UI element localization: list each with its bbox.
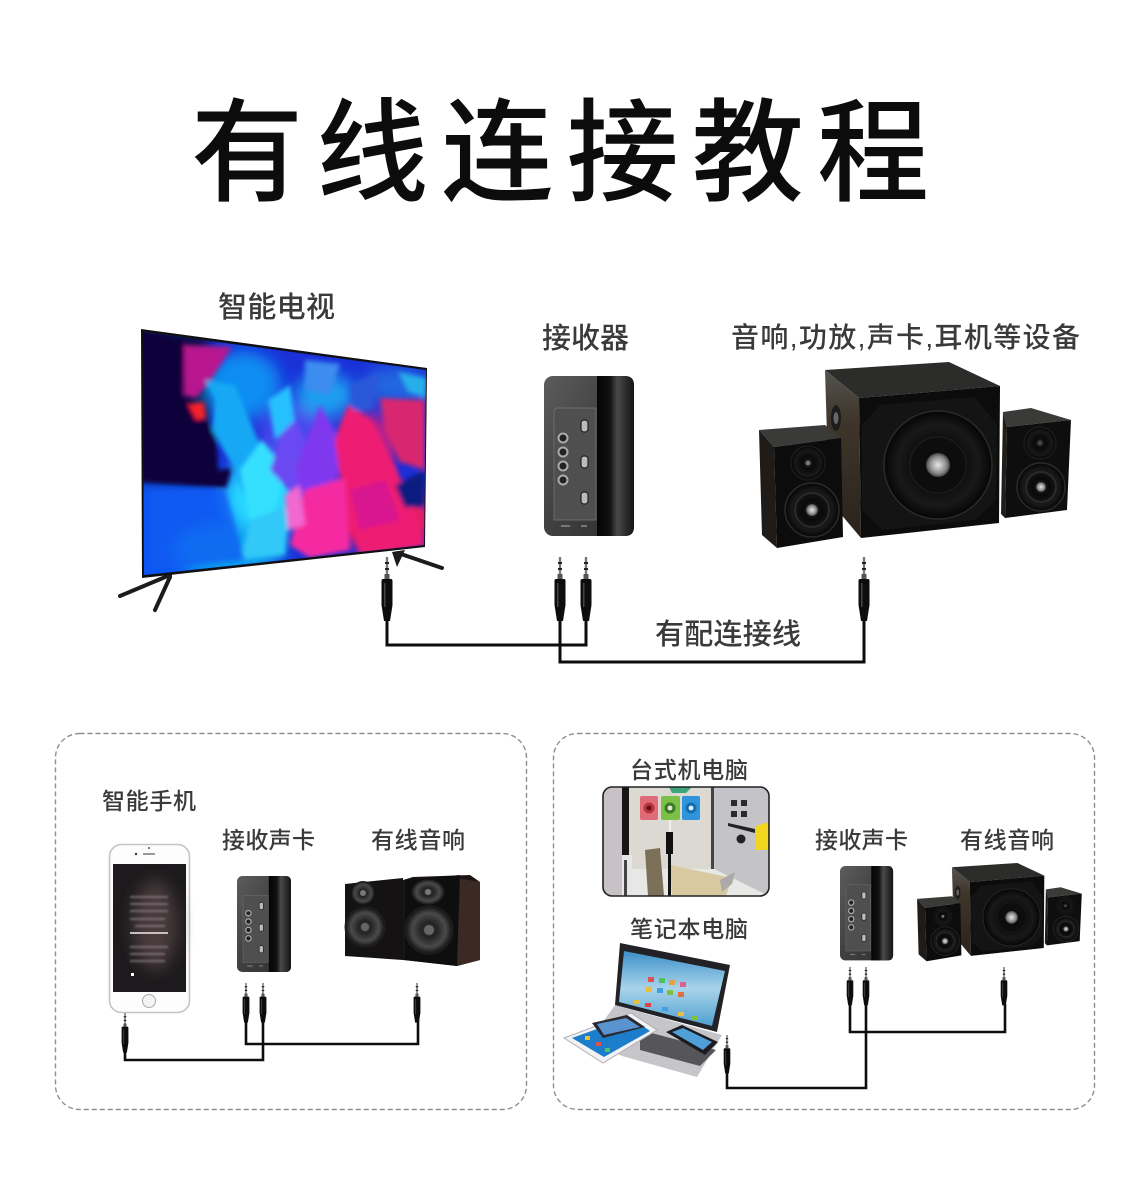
label: receiving sound card: 接收声卡 <box>222 827 315 853</box>
label: matching cable: 有配连接线 <box>655 618 801 651</box>
icon: receiver <box>544 376 634 536</box>
icon: sound card receiver <box>840 866 893 960</box>
title: 有线连接教程 <box>191 91 929 216</box>
label: wired speakers: 有线音响 <box>371 827 465 853</box>
label: audio devices: 音响,功放,声卡,耳机等设备 <box>731 322 1080 353</box>
icon: smartphone <box>110 844 190 1012</box>
icon: sound card receiver <box>237 876 291 972</box>
cable: phone connections <box>122 983 420 1060</box>
icon: smart TV <box>120 320 442 610</box>
panel: smartphone connection <box>56 734 526 1110</box>
icon: desktop audio ports <box>603 787 769 896</box>
panel: computer connection <box>554 734 1094 1110</box>
label: desktop computer: 台式机电脑 <box>630 757 748 783</box>
label: receiver: 接收器 <box>542 322 629 355</box>
infographic canvas <box>54 97 1096 1110</box>
label: smartphone: 智能手机 <box>102 788 196 814</box>
label: laptop computer: 笔记本电脑 <box>630 916 748 942</box>
cable: computer connections <box>724 967 1007 1088</box>
icon: 2.1 speaker set <box>759 362 1071 548</box>
icon: 2.1 speaker set <box>917 863 1082 961</box>
icon: bookshelf speakers <box>345 875 480 966</box>
label: wired speakers: 有线音响 <box>960 827 1054 853</box>
label: receiving sound card: 接收声卡 <box>815 827 908 853</box>
label: smart TV: 智能电视 <box>218 291 335 324</box>
cable: main connections <box>382 557 870 662</box>
icon: laptop with tablet and phones <box>564 943 730 1077</box>
